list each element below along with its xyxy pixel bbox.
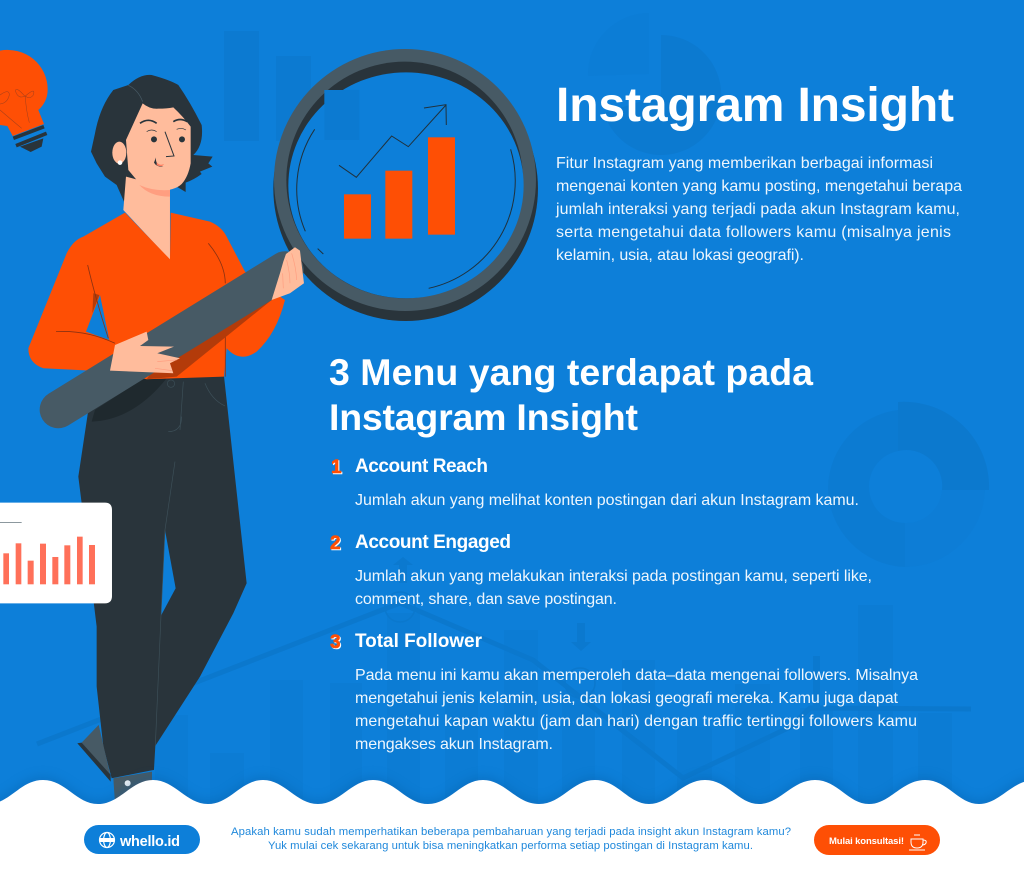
magnifying glass (273, 49, 538, 321)
wave shadow (0, 778, 1024, 871)
woman character (28, 75, 304, 803)
intro paragraph: mengenai konten yang kamu posting, mengetahui berapa (556, 178, 962, 195)
footer message: Apakah kamu sudah memperhatikan beberapa pembaharuan yang terjadi pada insight akun Instagram kamu? (231, 826, 791, 838)
trend arrow (339, 105, 446, 177)
floating chart card (0, 503, 112, 603)
menu item 3: mengetahui kapan waktu (jam dan hari) dengan traffic tertinggi followers kamu (355, 713, 917, 730)
consultation button: Mulai konsultasi! (829, 836, 904, 847)
orange blouse (28, 213, 285, 379)
intro paragraph (555, 155, 962, 264)
website badge: whello.id (119, 834, 180, 850)
hands (110, 247, 304, 373)
intro paragraph: Fitur Instagram yang memberikan berbagai informasi (556, 155, 933, 172)
menu item 3 (330, 631, 918, 753)
footer message (231, 826, 791, 852)
bar chart inside lens (344, 137, 455, 239)
consultation button (814, 825, 940, 855)
title: Instagram Insight (556, 79, 954, 132)
menu item 3: Total Follower (355, 631, 483, 652)
icon: light bulb (0, 50, 48, 152)
intro paragraph: jumlah interaksi yang terjadi pada akun Instagram kamu, (555, 201, 960, 218)
menu item 1: 1 (331, 457, 342, 478)
section heading: 3 Menu yang terdapat pada (329, 351, 814, 393)
section heading: Instagram Insight (329, 396, 638, 438)
footer white wave (0, 780, 1024, 871)
menu item 3: Pada menu ini kamu akan memperoleh data–data mengenai followers. Misalnya (355, 667, 918, 684)
website badge (84, 825, 200, 854)
menu item 2 (330, 532, 872, 608)
menu item 3: mengakses akun Instagram. (355, 736, 553, 753)
magnifier handle (58, 270, 285, 410)
neck and face (123, 103, 191, 260)
menu item 1: Account Reach (355, 456, 488, 477)
footer message: Yuk mulai cek sekarang untuk bisa meningkatkan performa setiap postingan di Instagram kamu. (268, 840, 753, 852)
shoes (77, 725, 152, 803)
handle shadow on blouse (147, 300, 272, 379)
menu item 2: 2 (330, 533, 341, 554)
trousers (78, 376, 247, 778)
menu item 1 (331, 456, 859, 509)
menu item 1: Jumlah akun yang melihat konten postingan dari akun Instagram kamu. (355, 492, 859, 509)
menu item 3: 3 (330, 632, 341, 653)
menu item 2: comment, share, dan save postingan. (355, 591, 617, 608)
section heading (329, 351, 814, 438)
intro paragraph: serta mengetahui data followers kamu (misalnya jenis (556, 224, 951, 241)
arm gap (86, 295, 109, 340)
facial features (112, 85, 187, 167)
icon: globe (100, 832, 114, 848)
hair (91, 75, 213, 202)
intro paragraph: kelamin, usia, atau lokasi geografi). (556, 247, 804, 264)
menu item 2: Jumlah akun yang melakukan interaksi pada postingan kamu, seperti like, (355, 568, 872, 585)
menu item 3: mengetahui jenis kelamin, usia, dan lokasi geografi mereka. Kamu juga dapat (355, 690, 899, 707)
menu item 2: Account Engaged (355, 532, 511, 553)
icon: coffee cup (909, 834, 926, 850)
